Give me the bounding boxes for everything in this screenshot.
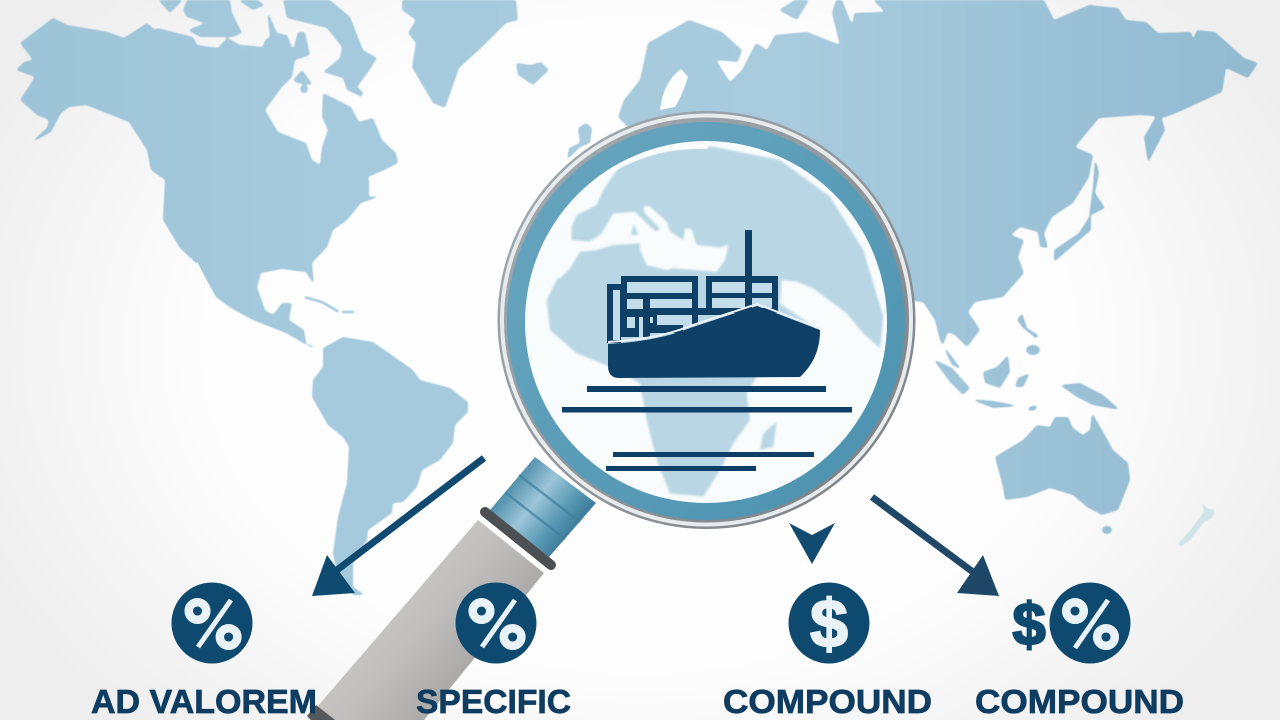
Novaya Zemlya: [779, 0, 809, 20]
New Zealand: [1178, 498, 1215, 547]
label: compound combined: COMPOUND: [975, 683, 1184, 720]
ship container stacks: [607, 276, 778, 343]
icon: compound dollar: [788, 582, 870, 664]
icon: ad valorem percent: [172, 582, 252, 664]
handle dark band: [485, 512, 551, 565]
arctic islands: [158, 0, 377, 97]
magnified Mediterranean: [547, 190, 728, 278]
rim highlight: [502, 116, 911, 524]
label: compound: COMPOUND: [723, 683, 932, 720]
magnified Corsica: [631, 224, 638, 235]
continent: North America: [16, 10, 398, 350]
continent: Eurasia: [618, 0, 1258, 370]
Greenland: [402, 0, 518, 108]
ship: [562, 230, 852, 471]
Tasmania: [1102, 526, 1112, 534]
lens rim: [498, 111, 916, 529]
collar stripes: [506, 475, 580, 539]
arrow: to compound combined: [872, 497, 999, 596]
Iceland: [516, 62, 549, 85]
inland sea: [660, 69, 688, 110]
glass highlight: [590, 147, 706, 186]
Indonesia: [933, 355, 1037, 411]
Baja California gulf: [196, 263, 214, 297]
Japan: [1054, 157, 1105, 262]
magnified map: [547, 147, 883, 497]
icon: compound dollar and percent: [1012, 582, 1130, 664]
Great Britain and Ireland: [567, 123, 592, 160]
ship mast: [745, 230, 752, 310]
icon: compound dollar and percent: $: [1012, 591, 1046, 658]
Sakhalin: [1144, 97, 1166, 163]
arrow: to ad valorem: [312, 458, 484, 596]
icon: specific percent: [456, 582, 536, 664]
arrow: to compound dollar: [789, 523, 835, 564]
label: specific: SPECIFIC: [416, 683, 571, 720]
ship hull highlight: [608, 304, 822, 342]
continent: South America: [312, 337, 468, 595]
handle grip: [310, 520, 544, 720]
water lines: [587, 386, 826, 392]
magnified land: Europe and Africa: [547, 147, 883, 497]
continent: Australia: [995, 413, 1130, 515]
lens glass: [525, 141, 887, 503]
Caribbean islands: [304, 297, 355, 312]
lens ring: [507, 122, 905, 520]
handle collar: [490, 457, 596, 557]
New Guinea: [1060, 383, 1120, 410]
handle bottom band: [307, 705, 335, 720]
Philippines: [1017, 313, 1040, 355]
magnifying glass: [307, 111, 916, 720]
magnified Madagascar: [760, 422, 777, 450]
label: ad valorem: AD VALOREM: [91, 683, 317, 720]
icon: compound dollar: $: [810, 586, 848, 662]
ship hull: [608, 306, 820, 378]
